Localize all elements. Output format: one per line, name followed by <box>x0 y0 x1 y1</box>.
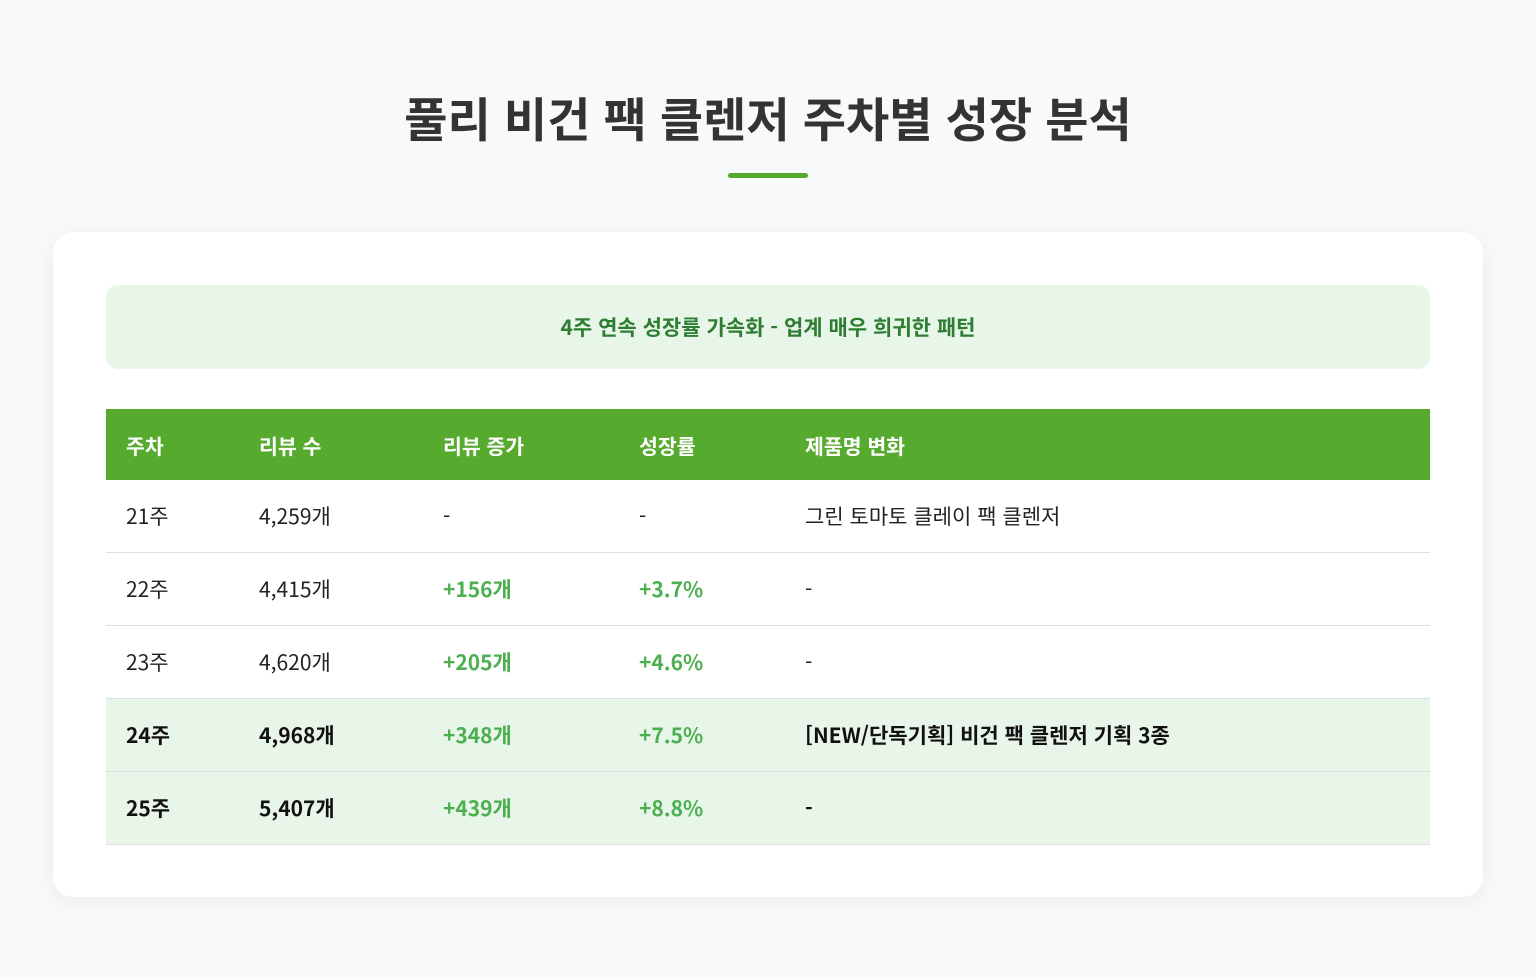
row: week 25 highlighted <box>106 772 1430 845</box>
row: week 25 highlighted: - <box>805 793 813 823</box>
row: week 22: +3.7% <box>639 574 703 604</box>
row: week 23 <box>106 626 1430 699</box>
row: week 22: 4,415개 <box>259 574 331 604</box>
row: week 21: - <box>443 501 450 531</box>
table header: 제품명 변화 <box>805 430 905 460</box>
row: week 23: 4,620개 <box>259 647 331 677</box>
row: week 25 highlighted: 25주 <box>126 793 170 823</box>
row: week 21: - <box>639 501 646 531</box>
table header: 주차 <box>126 430 164 460</box>
table header: 리뷰 증가 <box>443 430 524 460</box>
callout banner <box>106 285 1430 369</box>
table header <box>106 409 1430 480</box>
row: week 22 <box>106 553 1430 626</box>
row: week 24 highlighted: +348개 <box>443 720 512 750</box>
row: week 24 highlighted: +7.5% <box>639 720 703 750</box>
table header: 리뷰 수 <box>259 430 321 460</box>
callout banner: 4주 연속 성장률 가속화 - 업계 매우 희귀한 패턴 <box>560 312 975 342</box>
row: week 21: 4,259개 <box>259 501 331 531</box>
row: week 24 highlighted <box>106 699 1430 772</box>
row: week 23: - <box>805 647 812 677</box>
row: week 21: 21주 <box>126 501 169 531</box>
row: week 22: - <box>805 574 812 604</box>
row: week 22: 22주 <box>126 574 169 604</box>
title: 풀리 비건 팩 클렌저 주차별 성장 분석 <box>404 82 1132 151</box>
row: week 24 highlighted: 4,968개 <box>259 720 335 750</box>
row: week 24 highlighted: 24주 <box>126 720 170 750</box>
row: week 22: +156개 <box>443 574 512 604</box>
row: week 24 highlighted: [NEW/단독기획] 비건 팩 클렌저 기획 3종 <box>805 720 1170 750</box>
row: week 21 <box>106 480 1430 553</box>
row: week 25 highlighted: 5,407개 <box>259 793 335 823</box>
table header: 성장률 <box>639 430 696 460</box>
row: week 23: +4.6% <box>639 647 703 677</box>
row: week 25 highlighted: +439개 <box>443 793 512 823</box>
row: week 23: 23주 <box>126 647 169 677</box>
row: week 25 highlighted: +8.8% <box>639 793 703 823</box>
panel: main card <box>53 232 1483 897</box>
title underline accent <box>728 173 808 178</box>
data table <box>106 409 1430 845</box>
row: week 23: +205개 <box>443 647 512 677</box>
row: week 21: 그린 토마토 클레이 팩 클렌저 <box>805 501 1060 531</box>
